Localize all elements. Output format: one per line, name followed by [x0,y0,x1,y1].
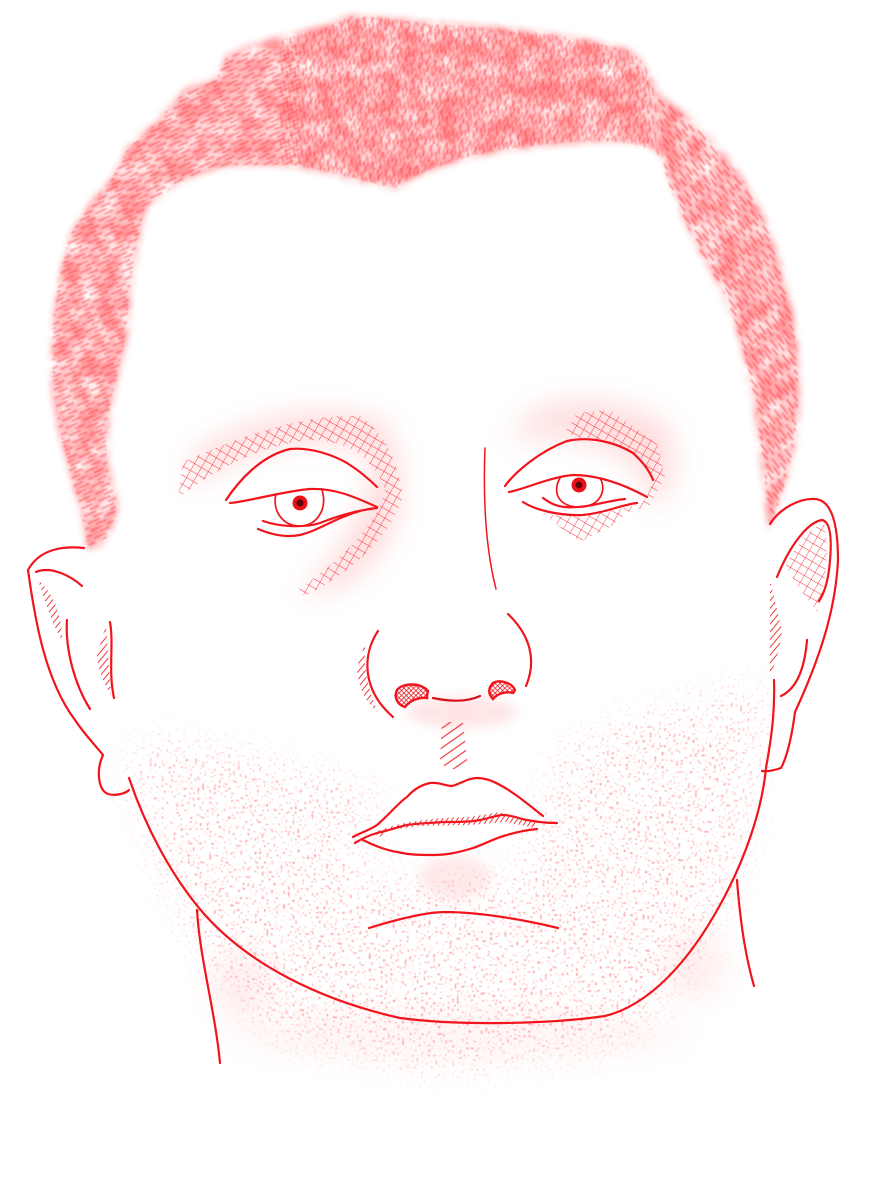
neck lines [197,880,754,1063]
lips [353,778,557,855]
hair base tone [51,15,800,550]
hair strokes crown [280,17,662,188]
left eye shading [178,414,402,596]
right ear [762,499,838,771]
soft wash on neck and jaw [210,930,725,1060]
hair strokes right side [658,96,798,525]
face outline and jaw [129,680,774,1023]
nose bridge line [484,448,496,589]
philtrum hatching [440,722,468,770]
hair strokes crown crossing [300,17,650,188]
right eye shading [510,401,674,542]
hair [51,15,800,550]
hair strokes left side [52,45,300,545]
nose [357,614,531,717]
left ear [28,547,129,795]
right eye [505,439,653,515]
cheek and jaw stippling [125,680,770,1070]
chin crease [369,912,558,928]
left eye [226,449,377,536]
soft shading under the nose and on the chin [407,696,517,900]
